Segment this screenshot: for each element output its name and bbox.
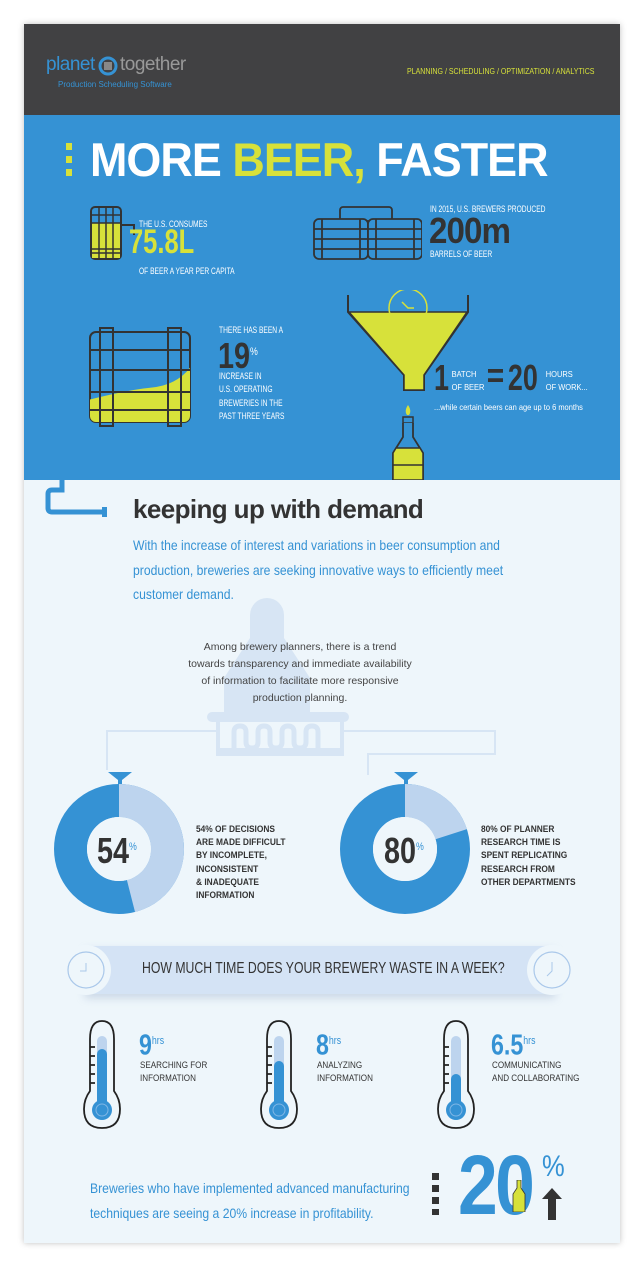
stat: 75.8L [90, 206, 235, 276]
stat: batch = hours: ...while certain beers can age up to 6 months [434, 402, 583, 412]
intro paragraph [133, 537, 504, 602]
icon: small barrel [90, 206, 135, 260]
stat: batch = hours: BATCH [452, 369, 476, 379]
donut: 54%: 54% OF DECISIONS [196, 824, 275, 835]
stat: 200m: BARRELS OF BEER [430, 249, 492, 259]
donut: 54%: INCONSISTENT [196, 864, 258, 875]
thermometer: 6.5hrs [437, 1020, 579, 1129]
donut: 80%: 80% [384, 830, 424, 871]
stat: 19%: BREWERIES IN THE [219, 398, 283, 408]
big stat: 20%: % [542, 1150, 565, 1183]
donut: 80%: 80% OF PLANNER [481, 824, 554, 835]
stat: 200m [313, 204, 546, 260]
stat: 75.8L: 75.8L [129, 223, 194, 261]
thermometer: 6.5hrs: COMMUNICATING [492, 1060, 561, 1071]
icon: bottle in zero [512, 1180, 526, 1212]
note text: towards transparency and immediate availability [188, 658, 412, 670]
donut: 80%: RESEARCH TIME IS [481, 837, 560, 848]
donut: 80%: SPENT REPLICATING [481, 850, 567, 861]
blue section [24, 115, 620, 480]
thermometer: 9hrs: INFORMATION [140, 1073, 196, 1084]
icon: bottle [392, 405, 424, 480]
donut: 80%: OTHER DEPARTMENTS [481, 877, 576, 888]
logo: planet [46, 54, 95, 75]
stat: 19% [89, 325, 284, 427]
stat: batch = hours: = [487, 357, 504, 395]
stat: batch = hours: OF BEER [452, 382, 484, 392]
thermometer: 8hrs: INFORMATION [317, 1073, 373, 1084]
thermometer: 8hrs [260, 1020, 373, 1129]
closing statement [90, 1180, 410, 1221]
stat: batch = hours: OF WORK... [546, 382, 588, 392]
intro paragraph: production, breweries are seeking innovative ways to efficiently meet [133, 562, 503, 578]
stat: 200m: IN 2015, U.S. BREWERS PRODUCED [430, 204, 545, 214]
donut: 54%: 54% [97, 830, 137, 871]
stat: batch = hours: HOURS [546, 369, 573, 379]
closing statement: techniques are seeing a 20% increase in profitability. [90, 1205, 373, 1221]
stat: batch = hours: 20 [508, 357, 538, 398]
banner: how much time [67, 946, 571, 1001]
stat: 19%: 19% [218, 335, 258, 376]
background: brew kettle [106, 598, 496, 775]
big stat: 20% [432, 1138, 565, 1232]
donut: 54%: INFORMATION [196, 890, 254, 901]
donut: 54%: ARE MADE DIFFICULT [196, 837, 285, 848]
thermometer: 6.5hrs: AND COLLABORATING [492, 1073, 579, 1084]
stat: 19%: THERE HAS BEEN A [219, 325, 283, 335]
donut: 54%: & INADEQUATE [196, 877, 259, 888]
icon: barrels [313, 206, 422, 260]
header bar [24, 24, 620, 115]
intro paragraph: customer demand. [133, 586, 234, 602]
donut: 54% [54, 772, 286, 914]
icon: clock left [67, 946, 111, 995]
icon: pipe [46, 480, 107, 517]
icon: dark dots [432, 1173, 439, 1215]
note text: production planning. [253, 692, 347, 704]
stat: 19%: INCREASE IN [219, 371, 262, 381]
intro paragraph: With the increase of interest and variations in beer consumption and [133, 537, 500, 553]
note text [188, 641, 412, 704]
big stat: 20%: 20 [458, 1138, 532, 1232]
donut: 80%: RESEARCH FROM [481, 864, 555, 875]
title: MORE BEER, FASTER [90, 133, 548, 186]
heading: keeping up with demand: keeping up with demand [133, 494, 423, 524]
logo: Production Scheduling Software [58, 80, 172, 89]
thermometer: 9hrs: 9hrs [139, 1030, 164, 1062]
thermometer: 8hrs: ANALYZING [317, 1060, 362, 1071]
stat: batch = hours: 1 [434, 357, 449, 398]
stat: 75.8L: THE U.S. CONSUMES [139, 219, 207, 229]
icon: funnel with clock [347, 290, 469, 391]
stat: 200m: 200m [429, 210, 510, 251]
stat: 19%: U.S. OPERATING [219, 384, 273, 394]
thermometer: 8hrs: 8hrs [316, 1030, 341, 1062]
icon: up arrow [542, 1188, 562, 1220]
icon: logo mark [98, 56, 118, 76]
note text: of information to facilitate more responsive [201, 675, 399, 687]
nav links: PLANNING / SCHEDULING / OPTIMIZATION / ANALYTICS [407, 67, 595, 76]
icon: big barrel [89, 327, 191, 427]
logo [46, 54, 186, 89]
thermometer: 9hrs: SEARCHING FOR [140, 1060, 207, 1071]
logo: together [120, 54, 186, 75]
closing statement: Breweries who have implemented advanced manufacturing [90, 1180, 410, 1196]
stat: 19%: PAST THREE YEARS [219, 411, 284, 421]
thermometer: 6.5hrs: 6.5hrs [491, 1030, 535, 1062]
thermometer: 9hrs [83, 1020, 207, 1129]
stat: 75.8L: OF BEER A YEAR PER CAPITA [139, 266, 235, 276]
stat: batch = hours [434, 357, 588, 412]
note text: Among brewery planners, there is a trend [204, 641, 396, 653]
donut: 54%: BY INCOMPLETE, [196, 850, 267, 861]
donut: 80% [340, 772, 576, 914]
banner: how much time: HOW MUCH TIME DOES YOUR BREWERY WASTE IN A WEEK? [142, 960, 505, 977]
icon: clock right [527, 946, 571, 995]
icon: yellow dots [66, 143, 72, 177]
